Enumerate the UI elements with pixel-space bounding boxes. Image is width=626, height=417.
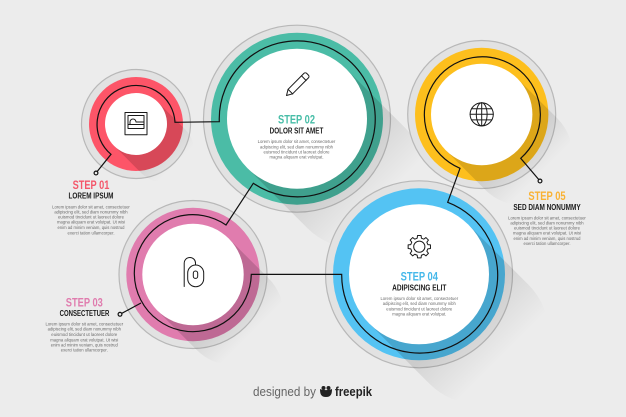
text block: step 1 <box>52 180 130 235</box>
text block: step 5 <box>508 191 586 246</box>
connector line through all steps <box>94 41 542 353</box>
circle: step 2 teal <box>202 24 412 236</box>
text block: step 2: adipiscing elit, sed diam nonummy nibh <box>260 144 333 149</box>
text block: step 3 <box>45 298 124 352</box>
text block: step 1: enim ad minim veniam, quis nostrud <box>58 225 125 230</box>
text block: step 5: Lorem ipsum dolor sit amet, consectetuer <box>508 216 586 221</box>
icon: gear <box>408 236 430 258</box>
text block: step 3: Lorem ipsum dolor sit amet, consectetuer <box>45 322 124 327</box>
text block: step 5: enim ad minim veniam, quis nostrud <box>514 236 581 241</box>
text block: step 4: euismod tincidunt ut laoreet dolore <box>386 306 453 311</box>
text block: step 4: STEP 04 <box>401 272 438 284</box>
footer: designed by freepik: designed by <box>253 385 317 399</box>
text block: step 3: CONSECTETUER <box>60 309 110 318</box>
text block: step 1: euismod tincidunt ut laoreet dolore <box>58 214 124 219</box>
text block: step 5: STEP 05 <box>528 191 566 203</box>
footer: designed by freepik <box>253 384 373 399</box>
text block: step 1: LOREM IPSUM <box>68 191 114 200</box>
text block: step 4: ADIPISCING ELIT <box>392 284 447 293</box>
text block: step 3: euismod tincidunt ut laoreet dolore <box>51 332 118 337</box>
text block: step 5: exerci tation ullamcorper. <box>524 241 570 246</box>
text block: step 1: STEP 01 <box>73 180 110 192</box>
text block: step 3: magna aliquam erat volutpat. Ut wisi <box>50 337 118 342</box>
icon: pencil <box>286 73 309 96</box>
text block: step 2: DOLOR SIT AMET <box>270 126 323 135</box>
text block: step 5: magna aliquam erat volutpat. Ut wisi <box>513 231 581 236</box>
infographic canvas <box>46 24 586 398</box>
text block: step 5: euismod tincidunt ut laoreet dolore <box>514 226 580 231</box>
text block: step 5: SED DIAM NONUMMY <box>513 203 581 212</box>
text block: step 2: euismod tincidunt ut laoreet dolore <box>264 149 330 154</box>
text block: step 1: exerci tation ullamcorper. <box>68 230 114 235</box>
text block: step 3: exerci tation ullamcorper. <box>61 347 108 352</box>
text block: step 4: Lorem ipsum dolor sit amet, consectetuer <box>380 296 459 301</box>
text block: step 1: Lorem ipsum dolor sit amet, consectetuer <box>52 204 130 209</box>
circle: step 4 blue <box>325 180 536 391</box>
text block: step 2: magna aliquam erat volutpat. <box>270 154 324 159</box>
text block: step 2: STEP 02 <box>278 115 315 127</box>
text block: step 4: adipiscing elit, sed diam nonummy nibh <box>383 301 456 306</box>
text block: step 3: enim ad minim veniam, quis nostrud <box>51 342 118 347</box>
circle: step 1 red <box>82 70 194 182</box>
text block: step 5: adipiscing elit, sed diam nonummy nibh <box>510 221 584 226</box>
text block: step 2 <box>258 115 336 159</box>
text block: step 2: Lorem ipsum dolor sit amet, consectetuer <box>258 139 336 144</box>
icon: picture <box>125 112 147 135</box>
icon: globe <box>470 103 493 126</box>
text block: step 4 <box>380 272 459 316</box>
circle: step 5 yellow <box>408 40 572 205</box>
text block: step 3: adipiscing elit, sed diam nonummy nibh <box>48 327 121 332</box>
text block: step 3: STEP 03 <box>66 298 103 310</box>
text block: step 1: adipiscing elit, sed diam nonummy nibh <box>54 209 128 214</box>
circle: step 3 pink <box>119 200 284 365</box>
icon: mouse <box>184 258 204 287</box>
text block: step 1: magna aliquam erat volutpat. Ut wisi <box>57 220 125 225</box>
text block: step 4: magna aliquam erat volutpat. <box>392 311 446 316</box>
footer: designed by freepik: freepik <box>335 384 373 399</box>
